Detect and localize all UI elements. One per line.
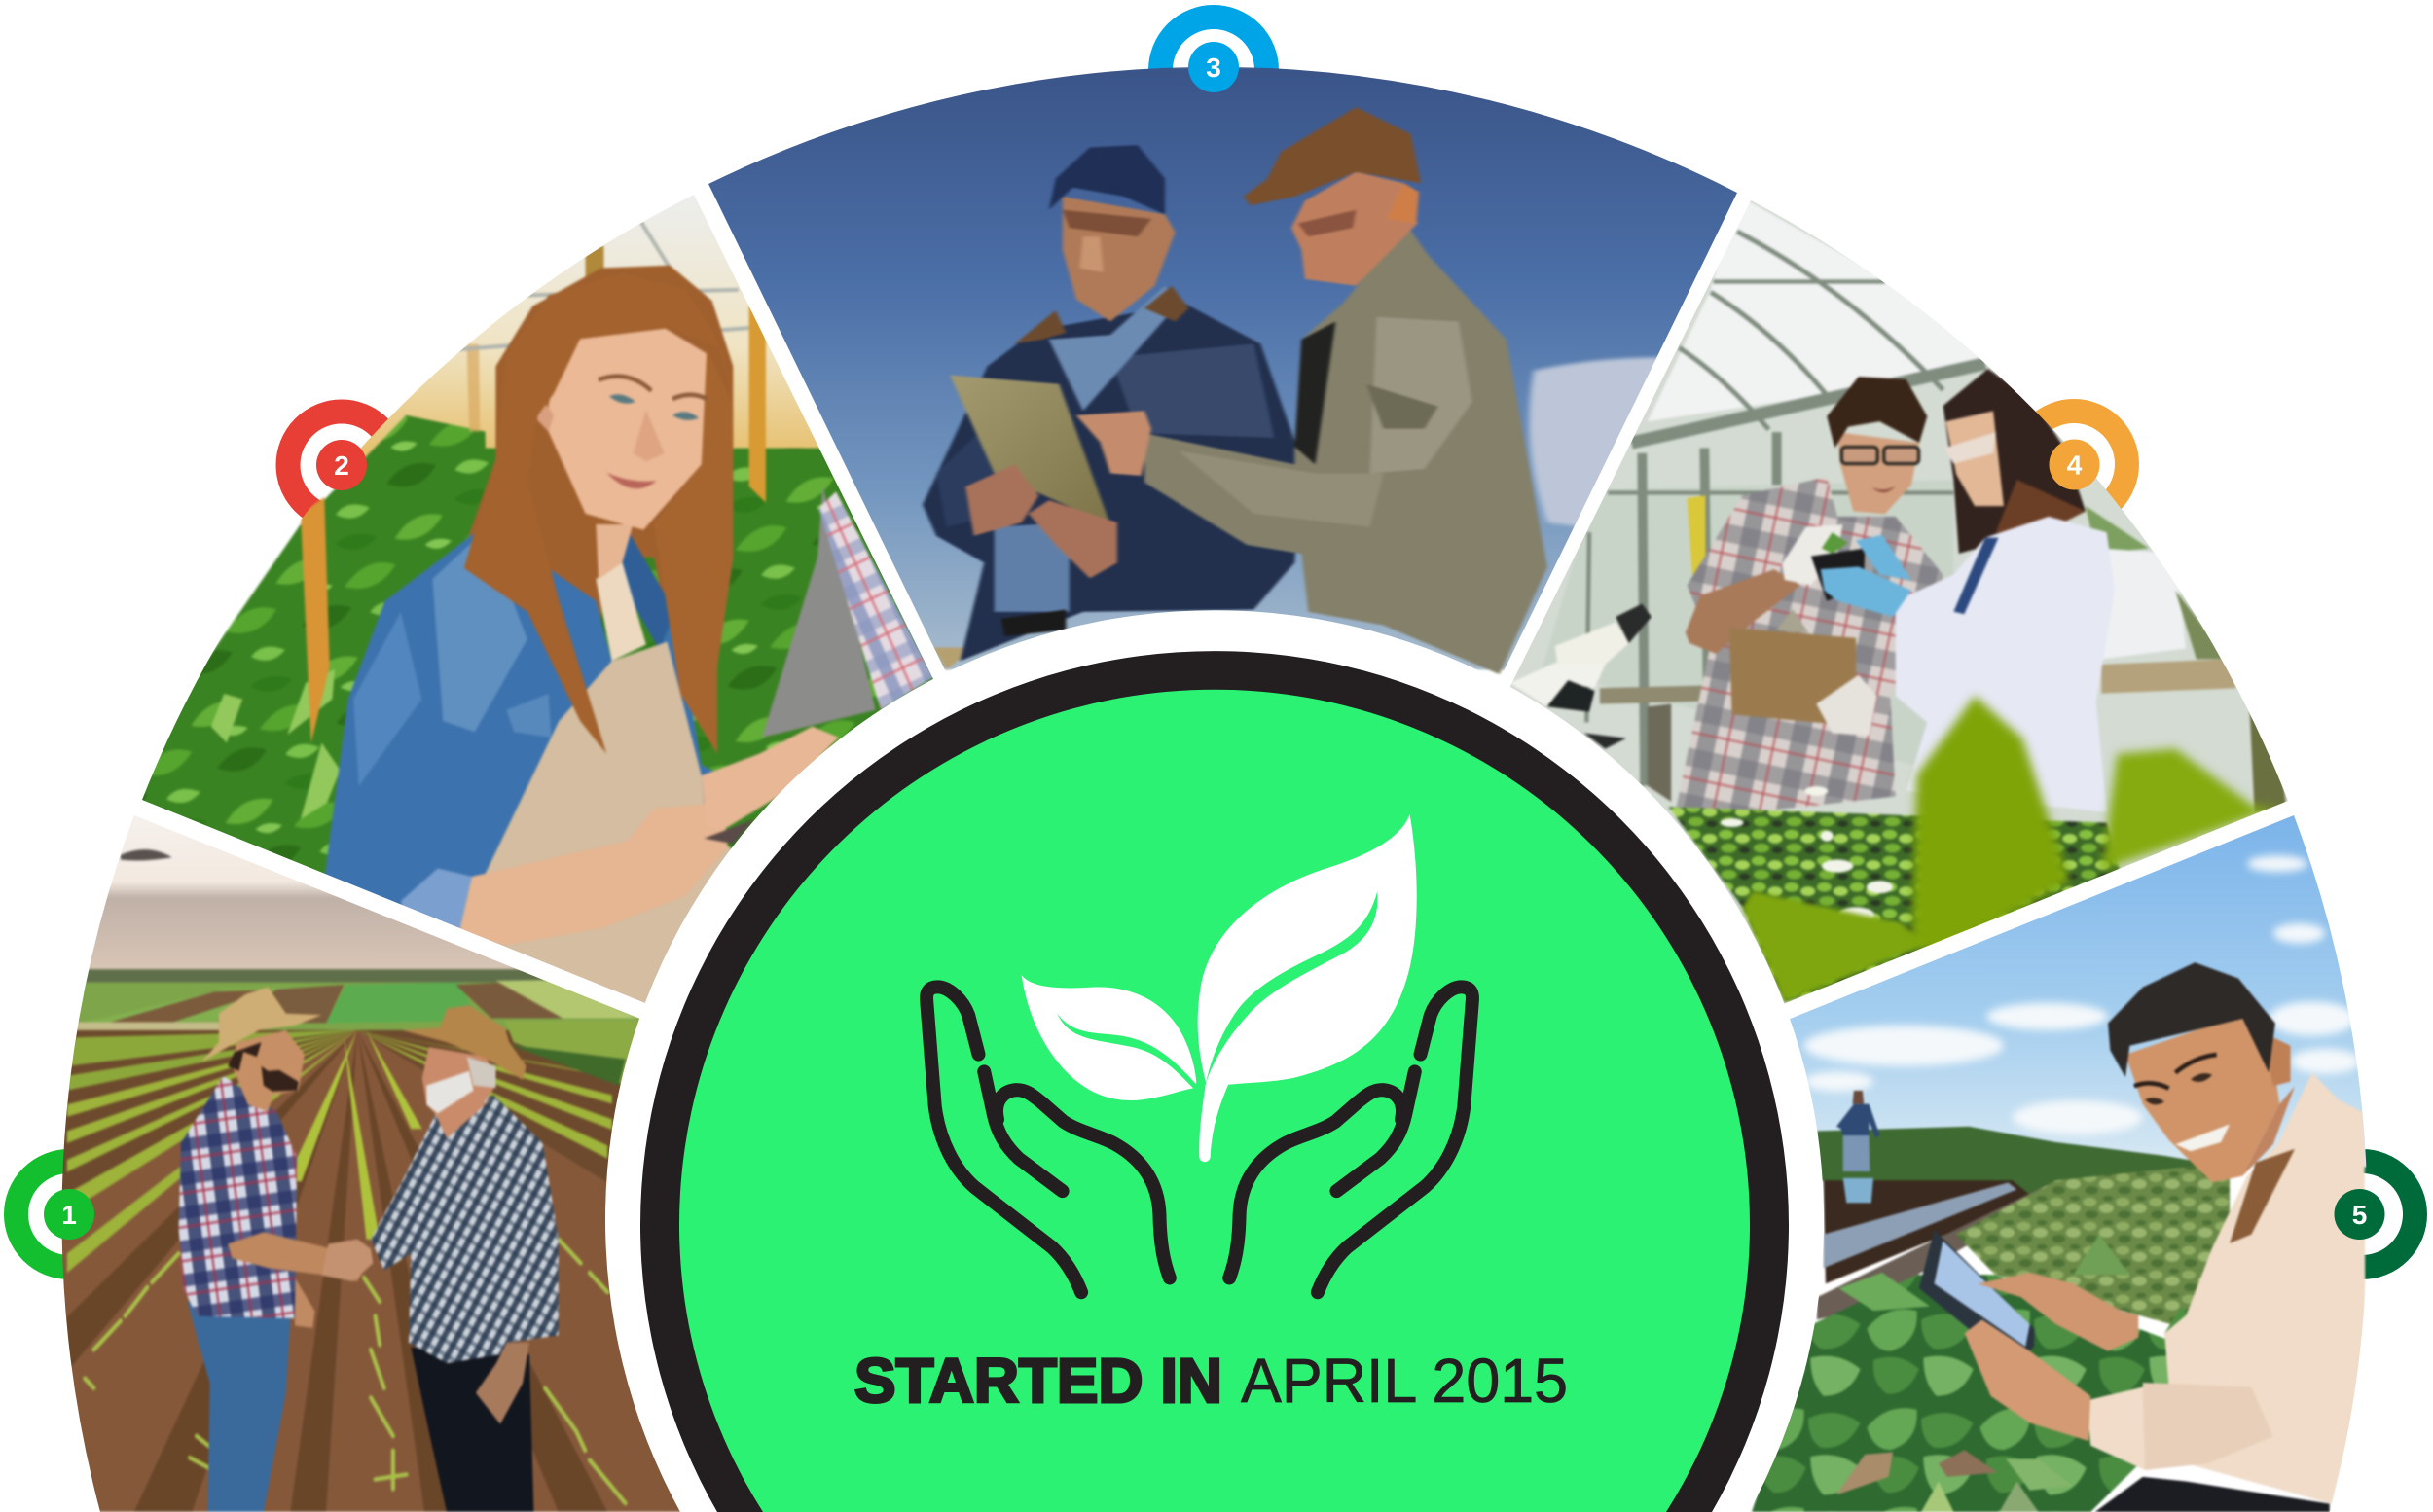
badge number 2: 2 xyxy=(334,450,349,481)
female scientist xyxy=(1811,369,2115,812)
photo panel 4: two scientists in a greenhouse xyxy=(1489,195,2317,1023)
male scientist xyxy=(1677,377,1943,812)
badge number 1 xyxy=(44,1189,94,1240)
badge number 3: 3 xyxy=(1206,53,1221,83)
black ring and green disc xyxy=(640,651,1789,1512)
badge number 1: 1 xyxy=(61,1200,77,1230)
background person in vest xyxy=(762,486,933,738)
icon: small leaf xyxy=(1022,975,1196,1100)
far worker xyxy=(1836,1091,1880,1203)
left farmer with cap xyxy=(923,145,1301,661)
icon: left hand xyxy=(926,987,1170,1292)
seedlings and blurred leaves xyxy=(1668,696,2281,1002)
badge ring 3 xyxy=(1160,18,1267,123)
tablet and hands xyxy=(950,376,1151,578)
badge ring 5 xyxy=(2308,1162,2415,1267)
badge ring 2 xyxy=(288,412,395,519)
badge number 2 xyxy=(316,440,367,490)
badge number 4 xyxy=(2050,440,2100,490)
right farmer xyxy=(321,1005,559,1512)
title: started in april 2015: STARTED IN xyxy=(854,1346,1222,1416)
microscope xyxy=(1510,603,1652,749)
badge number 3 xyxy=(1188,42,1239,92)
photo panel 3: two farmers reading a tablet under a blue sky xyxy=(701,67,1771,674)
photo panel 2: woman in apron in a pepper greenhouse xyxy=(127,175,954,1032)
icon: large leaf with stem xyxy=(1198,814,1417,1162)
woman xyxy=(324,266,839,1032)
right farmer with brown cap xyxy=(1144,107,1547,674)
badge number 5: 5 xyxy=(2352,1200,2367,1230)
white centre disc xyxy=(605,610,1824,1512)
photo panel 1: two farmers shaking hands in a field xyxy=(62,815,680,1512)
person with tablet xyxy=(1919,962,2365,1512)
badge ring 4 xyxy=(2020,411,2127,518)
logo: hands holding a sprout xyxy=(926,814,1472,1292)
icon: right hand xyxy=(1229,987,1472,1292)
left farmer xyxy=(179,987,371,1512)
title: started in april 2015: APRIL 2015 xyxy=(1241,1346,1568,1416)
badge number 4: 4 xyxy=(2067,450,2083,481)
photo panel 5: person using a tablet in a crop field xyxy=(1750,815,2367,1512)
badge number 5 xyxy=(2334,1189,2384,1240)
badge ring 1 xyxy=(16,1162,123,1267)
